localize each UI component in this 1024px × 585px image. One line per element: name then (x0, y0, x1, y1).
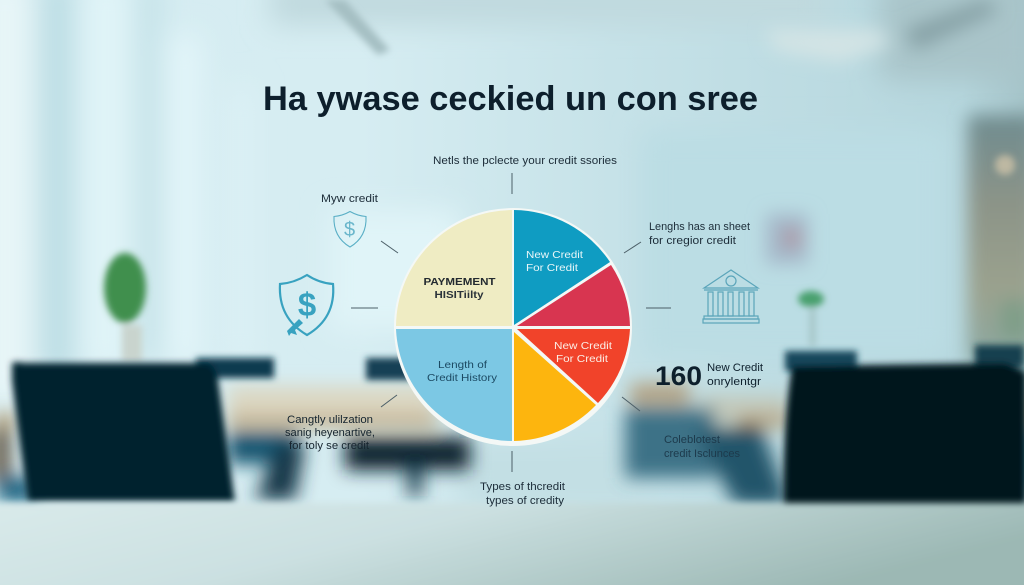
icon: bank building (703, 270, 759, 323)
stat: 160 new credit: New Credit (707, 362, 763, 374)
slice: yellow (514, 332, 596, 441)
slice: new credit blue: New Credit (526, 249, 583, 261)
icon: large shield with dollar (280, 275, 333, 336)
label: lengths (649, 221, 750, 247)
label: credit issuances: Coleblotest (664, 434, 720, 446)
label: utilization: sanig heyenartive, (285, 427, 375, 439)
label: lengths: for cregior credit (649, 235, 736, 247)
top label: Netls the pclecte your credit ssories (433, 155, 618, 167)
slice: length of credit history: Credit History (427, 372, 498, 384)
pie chart: credit score factors (394, 208, 632, 446)
connector lines (351, 173, 671, 472)
slice: payment history: PAYMEMENT (424, 276, 496, 288)
stat: 160 new credit: onrylentgr (707, 376, 761, 388)
label: my credit: Myw credit (321, 193, 378, 205)
slice: payment history (396, 210, 512, 326)
slice: red (517, 265, 630, 326)
label: lengths: Lenghs has an sheet (649, 221, 750, 233)
slice: length of credit history (396, 329, 512, 441)
label: utilization: for toly se credit (289, 440, 369, 452)
slice: new credit orange-red (517, 329, 630, 403)
stat: 160 new credit (655, 361, 763, 391)
label: types of credit: types of credity (486, 495, 565, 507)
slice: new credit blue: For Credit (526, 262, 578, 274)
label: utilization: Cangtly ulilzation (287, 414, 373, 426)
label: credit issuances (664, 434, 740, 460)
stat: 160 new credit: 160 (655, 361, 702, 391)
label: types of credit (480, 481, 565, 507)
icon: large shield with dollar: $ (298, 286, 316, 323)
label: credit issuances: credit Isclunces (664, 448, 740, 460)
icon: small shield with dollar (334, 212, 366, 247)
icon: small shield with dollar: $ (344, 219, 355, 241)
slice: length of credit history: Length of (438, 359, 487, 371)
label: utilization (285, 414, 375, 452)
slice: new credit blue (514, 210, 610, 325)
slice: new credit orange-red: For Credit (556, 353, 608, 365)
label: types of credit: Types of thcredit (480, 481, 565, 493)
slice: new credit orange-red: New Credit (554, 340, 612, 352)
title: Ha ywase ceckied un con sree (263, 80, 758, 118)
slice: payment history: HISITiilty (434, 289, 484, 301)
